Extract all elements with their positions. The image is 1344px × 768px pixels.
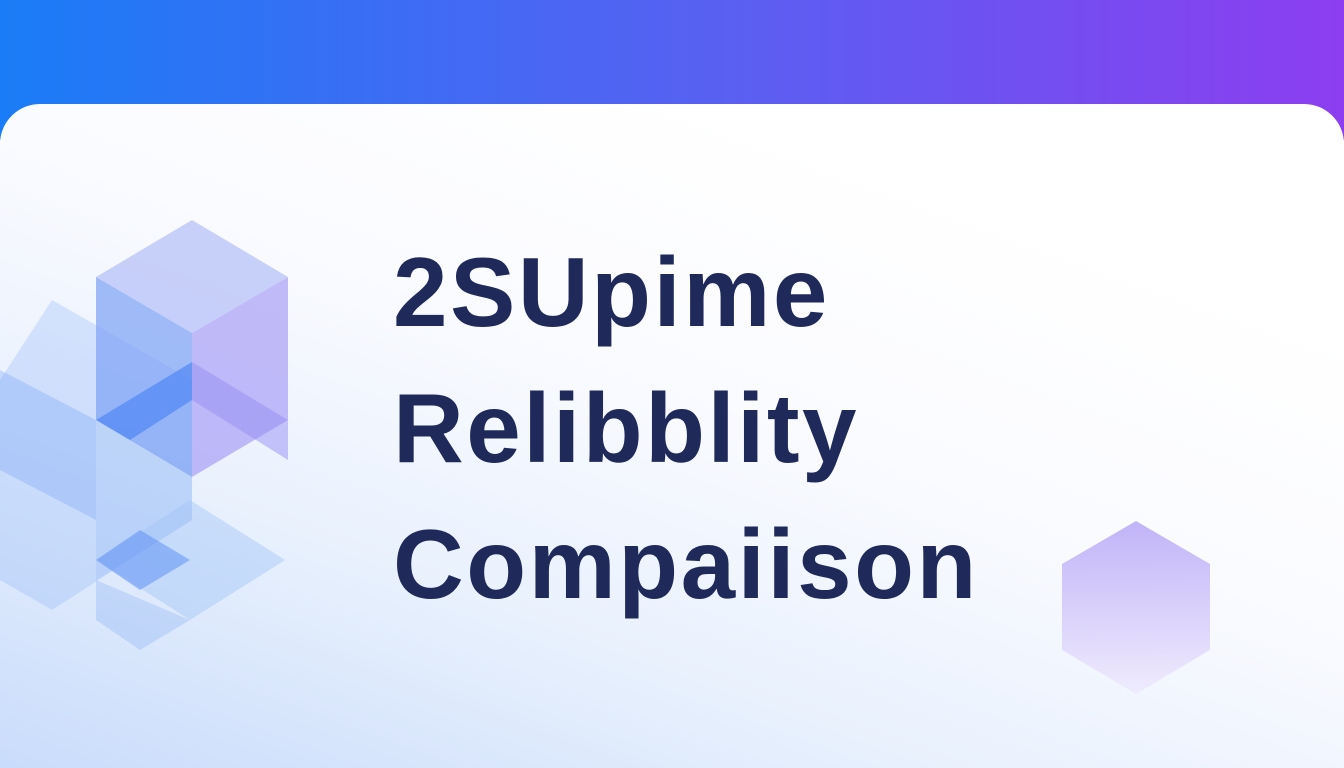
decorative hexagon right (1062, 521, 1210, 694)
title: Relibblity (393, 373, 859, 483)
title: 2SUpime (393, 237, 830, 347)
title (393, 237, 979, 619)
decorative cubes left (0, 220, 288, 650)
title: Compaiison (393, 509, 979, 619)
header gradient bar (0, 0, 1344, 140)
